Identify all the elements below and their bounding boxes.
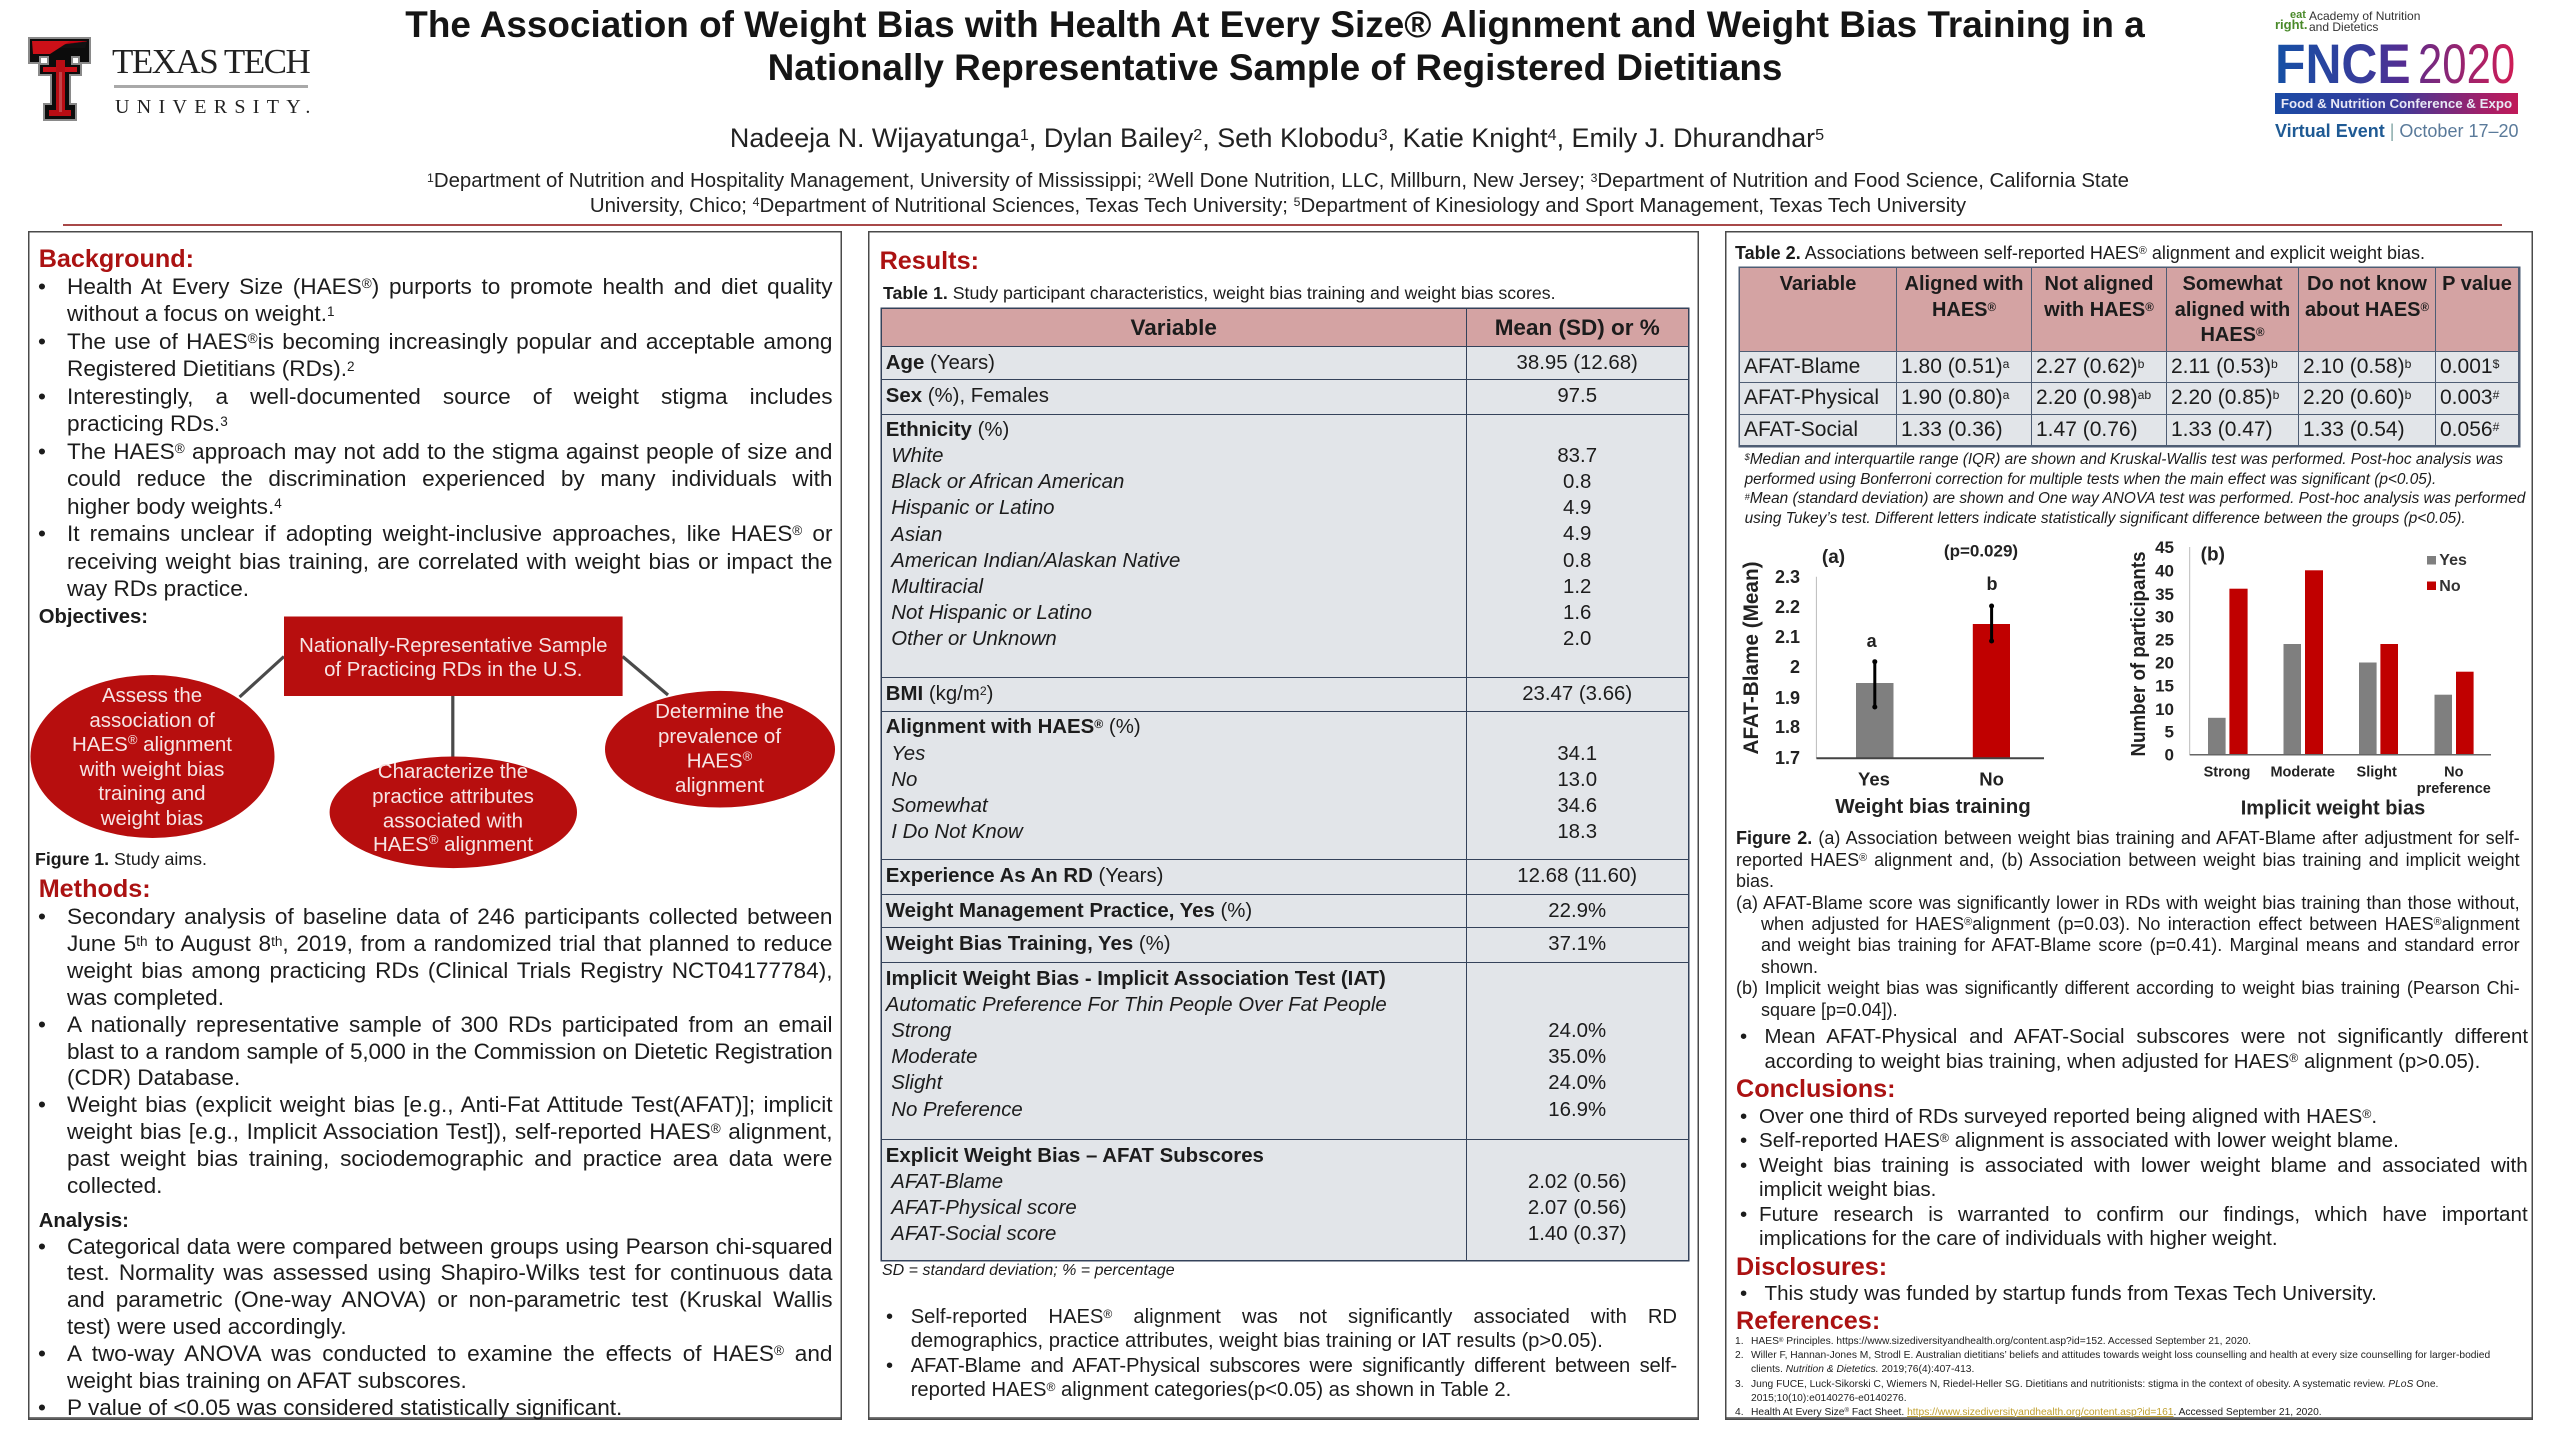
logo: FNCE 2020 [2275, 9, 2519, 141]
ellipse: characterize practice attributes: HAES [373, 833, 429, 856]
table 2: 2.20 (0.60)b [2303, 386, 2411, 409]
references list: 4. [1735, 1407, 1744, 1418]
row: ethnicity: 4.9 [1563, 523, 1591, 545]
ellipse: determine prevalence: prevalence of [658, 725, 781, 748]
ellipse: determine prevalence [605, 691, 835, 808]
heading: Background: Background: [39, 245, 194, 273]
ellipse: characterize practice attributes: associated with [383, 810, 523, 833]
heading: Analysis: Analysis: [39, 1210, 129, 1232]
chart a: AFAT-Blame by weight bias training: (p=0.029) [1944, 542, 2018, 560]
ellipse: assess association: ® [128, 732, 138, 747]
row: explicit weight bias: 2.07 (0.56) [1528, 1197, 1626, 1219]
row: ethnicity: Ethnicity (%) [886, 419, 1009, 441]
ellipse: assess association: weight bias [100, 807, 203, 830]
ellipse: assess association: Assess the [102, 684, 202, 707]
chart b: implicit weight bias by training: 25 [2155, 630, 2174, 650]
figure 2 caption: (a) AFAT-Blame score was significantly lower in RDs with weight bias training than those without, [1736, 893, 2520, 913]
row: weight bias training: 37.1% [1548, 933, 1606, 955]
analysis bullet list: Categorical data were compared between groups using Pearson chi-squared [67, 1234, 832, 1258]
figure 2 bullet [1740, 1025, 2528, 1074]
chart b: implicit weight bias by training: Number of participants [2128, 552, 2150, 756]
logo text: 2020: 2020 [2418, 32, 2515, 95]
title [405, 4, 2145, 88]
row: ethnicity: 0.8 [1563, 471, 1591, 493]
table 2: 1.33 (0.36) [1901, 418, 2003, 441]
background bullet list: The HAES® approach may not add to the stigma against people of size and [67, 439, 832, 464]
references list: clients. Nutrition & Dietetics. 2019;76(4):407-413. [1751, 1364, 1974, 1375]
row: age [882, 346, 1688, 379]
chart a: AFAT-Blame by weight bias training: a [1867, 631, 1878, 651]
row: age: 38.95 (12.68) [1517, 352, 1638, 374]
table 2: 2.27 (0.62)b [2036, 355, 2144, 378]
chart b: implicit weight bias by training: 45 [2155, 538, 2174, 557]
row: ethnicity: Asian [891, 524, 942, 546]
chart b: implicit weight bias by training [2128, 538, 2491, 820]
conclusions bullet list: Over one third of RDs surveyed reported being aligned with HAES®. [1759, 1105, 2377, 1128]
row: explicit weight bias: 2.02 (0.56) [1528, 1171, 1626, 1193]
heading: Results: Results: [880, 247, 979, 275]
references list: 3. [1735, 1379, 1744, 1390]
figure 2 caption: shown. [1761, 957, 1818, 977]
heading: Objectives: Objectives: [39, 606, 148, 628]
row: implicit weight bias: Slight [891, 1072, 942, 1094]
background bullet list: Registered Dietitians (RDs).2 [67, 356, 355, 381]
row: BMI [882, 677, 1688, 711]
row: implicit weight bias: Moderate [891, 1046, 977, 1068]
background bullet list: It remains unclear if adopting weight-inclusive approaches, like HAES® or [67, 521, 832, 546]
table 2 footnotes: #Mean (standard deviation) are shown and One way ANOVA test was performed. Post-hoc analysis was performed [1745, 490, 2525, 507]
logo text: Virtual Event: Virtual Event | October 17–20 [2275, 121, 2519, 141]
panel: background and methods [28, 231, 842, 1420]
logo: eat right Academy of Nutrition and Dietetics: right. [2275, 17, 2308, 32]
header [28, 4, 2519, 226]
row: ethnicity: Not Hispanic or Latino [891, 602, 1092, 624]
panel: table 2, figure 2, conclusions [1725, 231, 2533, 1420]
table 2: 1.33 (0.47) [2171, 418, 2273, 441]
row: weight management practice [882, 894, 1688, 927]
table 2: 2.11 (0.53)b [2171, 355, 2278, 378]
chart b: implicit weight bias by training: 30 [2155, 608, 2174, 626]
conclusions bullet list: implicit weight bias. [1759, 1178, 1936, 1201]
row: alignment with HAES: 34.6 [1557, 795, 1597, 817]
chart b: implicit weight bias by training: 5 [2165, 722, 2174, 742]
table 2: AFAT-Blame [1744, 355, 1860, 378]
row: implicit weight bias: Implicit Weight Bias - Implicit Association Test (IAT) [886, 968, 1386, 990]
background bullet list [38, 274, 832, 601]
ellipse: characterize practice attributes: Characterize the [378, 760, 528, 783]
box: sample: Nationally-Representative Sample [299, 635, 607, 657]
logo: eat right Academy of Nutrition and Dietetics: and Dietetics [2309, 20, 2378, 34]
references list: 1. [1735, 1336, 1744, 1347]
logo wordmark: UNIVERSITY: UNIVERSITY. [115, 96, 318, 118]
chart a: AFAT-Blame by weight bias training: b [1986, 574, 1998, 594]
conclusions bullet list [1740, 1105, 2528, 1250]
ellipse: determine prevalence: ® [743, 749, 753, 764]
ellipse: determine prevalence: Determine the [655, 700, 784, 723]
chart b: implicit weight bias by training: 10 [2155, 700, 2174, 719]
affiliations: 1Department of Nutrition and Hospitality Management, University of Mississippi; 2Well Done Nutrition, LLC, Millburn, New Jersey; 3Department of Nutrition and Food Science, California State [427, 170, 2129, 192]
affiliations: University, Chico; 4Department of Nutritional Sciences, Texas Tech University; 5Department of Kinesiology and Sport Management, Texas Tech University [590, 194, 1966, 216]
row: explicit weight bias: AFAT-Physical score [891, 1197, 1077, 1219]
analysis bullet list [38, 1234, 832, 1420]
heading: Disclosures: Disclosures: [1736, 1253, 1887, 1281]
header divider [63, 224, 2502, 226]
row: experience [882, 859, 1688, 894]
row: sex: 97.5 [1557, 385, 1597, 407]
row: alignment with HAES: 13.0 [1557, 769, 1597, 791]
table 1 header [882, 308, 1688, 346]
row: ethnicity: Black or African American [891, 471, 1124, 493]
logo: eat right Academy of Nutrition and Dietetics: eat [2290, 9, 2306, 21]
chart a: AFAT-Blame by weight bias training: 2 [1790, 657, 1800, 677]
table 2: 0.001$ [2440, 355, 2499, 378]
chart a: AFAT-Blame by weight bias training: 2.3 [1775, 567, 1800, 587]
table 2 footnotes: using Tukey’s test. Different letters indicate statistically significant difference between the groups (p<0.05). [1745, 510, 2466, 527]
chart a: AFAT-Blame by weight bias training: 1.7 [1775, 748, 1800, 768]
chart a: AFAT-Blame by weight bias training: 1.9 [1775, 688, 1800, 708]
row: alignment with HAES: Alignment with HAES® (%) [886, 716, 1141, 738]
conclusions bullet list: implications for the care of individuals with higher weight. [1759, 1227, 2278, 1250]
row: alignment with HAES: Yes [891, 743, 925, 765]
chart a: AFAT-Blame by weight bias training: Weight bias training [1835, 795, 2031, 818]
methods bullet list: blast to a random sample of 5,000 in the Commission on Dietetic Registration [67, 1039, 832, 1064]
row: ethnicity: American Indian/Alaskan Native [891, 550, 1180, 572]
row: explicit weight bias: AFAT-Social score [891, 1223, 1056, 1245]
box: sample [284, 616, 623, 696]
chart b: implicit weight bias by training: 0 [2165, 746, 2174, 764]
authors: Nadeeja N. Wijayatunga1, Dylan Bailey2, Seth Klobodu3, Katie Knight4, Emily J. Dhurandhar5 [730, 123, 1824, 153]
chart a: AFAT-Blame by weight bias training: AFAT-Blame (Mean) [1740, 562, 1763, 754]
chart b: implicit weight bias by training: Moderate [2270, 764, 2335, 780]
row: implicit weight bias [882, 962, 1688, 1139]
table 1 header: Mean (SD) or % [1495, 314, 1660, 340]
conclusions bullet list: Future research is warranted to confirm our findings, which have important [1759, 1203, 2528, 1226]
row: alignment with HAES: 34.1 [1557, 743, 1597, 765]
chart b: implicit weight bias by training: No [2444, 764, 2464, 780]
logo rule [114, 85, 308, 88]
figure 2 caption: square [p=0.04]). [1761, 1000, 1898, 1020]
background bullet list: Interestingly, a well-documented source of weight stigma includes [67, 384, 832, 409]
row: weight management practice: 22.9% [1548, 900, 1606, 922]
ellipse: characterize practice attributes: practice attributes [372, 785, 534, 808]
logo: Texas Tech University [28, 37, 318, 121]
chart b: implicit weight bias by training: 15 [2155, 676, 2174, 696]
methods bullet list: was completed. [67, 985, 224, 1010]
chart b: implicit weight bias by training: (b) [2201, 544, 2225, 566]
row: ethnicity: Other or Unknown [891, 628, 1057, 650]
table 2: with HAES® [2044, 299, 2154, 321]
analysis bullet list: A two-way ANOVA was conducted to examine the effects of HAES® and [67, 1341, 832, 1366]
analysis bullet list: and parametric (One-way ANOVA) or non-parametric test (Kruskal Wallis [67, 1287, 832, 1312]
ellipse: assess association: with weight bias [79, 758, 224, 781]
chart a: AFAT-Blame by weight bias training: (a) [1822, 547, 1845, 568]
chart b: implicit weight bias by training: preference [2417, 781, 2491, 797]
methods bullet list [38, 904, 832, 1198]
row: alignment with HAES: Somewhat [891, 795, 988, 817]
references list: Jung FUCE, Luck-Sikorski C, Wiemers N, Riedel-Heller SG. Dietitians and nutritionists: stigma in the context of obesity. A systematic review. PLoS One. [1751, 1379, 2438, 1390]
row: ethnicity: 4.9 [1563, 497, 1591, 519]
table 2: 1.47 (0.76) [2036, 418, 2138, 441]
row: experience: Experience As An RD (Years) [886, 865, 1163, 887]
chart a: AFAT-Blame by weight bias training: No [1979, 768, 2004, 790]
table 2: 1.80 (0.51)a [1901, 355, 2009, 378]
row: experience: 12.68 (11.60) [1517, 865, 1637, 887]
row: BMI: 23.47 (3.66) [1522, 683, 1632, 705]
table 2: 1.33 (0.54) [2303, 418, 2405, 441]
row: alignment with HAES: I Do Not Know [891, 821, 1023, 843]
ellipse: assess association: association of [89, 709, 215, 732]
heading: References: References: [1736, 1307, 1880, 1335]
row: ethnicity: White [891, 445, 943, 467]
chart b: implicit weight bias by training: 20 [2155, 654, 2174, 672]
table 2: HAES® [2200, 324, 2265, 346]
row: implicit weight bias: Strong [891, 1020, 951, 1042]
table 2: 0.056# [2440, 418, 2499, 441]
background bullet list: higher body weights.4 [67, 494, 282, 519]
row: alignment with HAES: 18.3 [1557, 821, 1597, 843]
chart a: AFAT-Blame by weight bias training: 2.1 [1775, 627, 1800, 647]
chart b: implicit weight bias by training: No [2439, 578, 2461, 595]
analysis bullet list: test. Normality was assessed using Shapiro-Wilks test for continuous data [67, 1260, 832, 1285]
diagram: study aims [30, 616, 835, 868]
methods bullet list: weight bias among practicing RDs (Clinical Trials Registry NCT04177784), [67, 958, 832, 983]
logo banner: Food & Nutrition Conference & Expo: Food & Nutrition Conference & Expo [2281, 96, 2512, 111]
methods bullet list: Weight bias (explicit weight bias [e.g., Anti-Fat Attitude Test(AFAT)]; implicit [67, 1092, 832, 1117]
logo: eat right Academy of Nutrition and Dietetics [2275, 9, 2420, 34]
heading: Methods: Methods: [39, 875, 151, 903]
chart b: implicit weight bias by training: 40 [2155, 562, 2174, 580]
row: ethnicity: 2.0 [1563, 628, 1591, 650]
chart b: implicit weight bias by training: Yes [2439, 552, 2467, 569]
table 2: about HAES® [2305, 299, 2429, 321]
row: implicit weight bias: Automatic Preference For Thin People Over Fat People [886, 994, 1387, 1016]
table 2 footnotes [1744, 451, 2526, 527]
disclosures bullet: This study was funded by startup funds from Texas Tech University. [1764, 1282, 2377, 1305]
table 1 footnote: SD = standard deviation; % = percentage [882, 1262, 1175, 1279]
analysis bullet list: test) were used accordingly. [67, 1314, 347, 1339]
ellipse: assess association: alignment [137, 733, 232, 756]
row: BMI: BMI (kg/m2) [886, 683, 993, 705]
ellipse: characterize practice attributes [330, 756, 577, 868]
chart b: implicit weight bias by training: Implicit weight bias [2241, 798, 2425, 820]
title: Nationally Representative Sample of Registered Dietitians [768, 47, 1782, 88]
icon: double T emblem [28, 37, 91, 121]
results bullet list: demographics, practice attributes, weight bias training or IAT results (p>0.05). [911, 1330, 1603, 1352]
results bullet list: Self-reported HAES® alignment was not significantly associated with RD [911, 1306, 1677, 1328]
background bullet list: practicing RDs.3 [67, 411, 228, 436]
analysis bullet list: weight bias training on AFAT subscores. [67, 1368, 467, 1393]
table 1 [882, 308, 1688, 1260]
panel: results [868, 231, 1699, 1420]
table 2: 2.20 (0.98)ab [2036, 386, 2151, 409]
figure 1 caption: Figure 1. Study aims. [35, 849, 207, 869]
chart a: AFAT-Blame by weight bias training: 2.2 [1775, 597, 1800, 617]
results bullet list [886, 1306, 1677, 1401]
figure 2 caption: when adjusted for HAES®alignment (p=0.03). No interaction effect between HAES®alignment [1761, 914, 2520, 934]
row: sex [882, 379, 1688, 414]
table 2: Not aligned [2045, 273, 2153, 295]
references list: HAES® Principles. https://www.sizediversityandhealth.org/content.asp?id=152. Accessed September 21, 2020. [1751, 1336, 2251, 1347]
logo banner: Food & Nutrition Conference & Expo [2275, 93, 2518, 114]
figure 2 caption: and weight bias training for AFAT-Blame score (p=0.41). Marginal means and standard error [1761, 935, 2520, 955]
chart a: AFAT-Blame by weight bias training [1740, 542, 2044, 818]
chart b: implicit weight bias by training: 35 [2155, 585, 2174, 604]
background bullet list: without a focus on weight.1 [67, 301, 335, 326]
ellipse: determine prevalence: HAES [687, 750, 743, 773]
row: ethnicity: 1.6 [1563, 602, 1591, 624]
chart a: AFAT-Blame by weight bias training: 1.8 [1775, 717, 1800, 737]
row: ethnicity: 1.2 [1563, 576, 1591, 598]
analysis bullet list: P value of <0.05 was considered statistically significant. [67, 1395, 622, 1420]
methods bullet list: weight bias [e.g., Implicit Association Test]), self-reported HAES® alignment, [67, 1119, 832, 1144]
background bullet list: Health At Every Size (HAES®) purports to promote health and diet quality [67, 274, 832, 299]
chart a: AFAT-Blame by weight bias training: Yes [1858, 768, 1890, 790]
ellipse: assess association: HAES [72, 733, 128, 756]
references list: 2. [1735, 1350, 1744, 1361]
background bullet list: receiving weight bias training, are correlated with weight bias or impact the [67, 549, 832, 574]
references list [1735, 1336, 2490, 1418]
row: ethnicity: Hispanic or Latino [891, 497, 1055, 519]
box: sample: of Practicing RDs in the U.S. [324, 659, 582, 681]
title: The Association of Weight Bias with Health At Every Size® Alignment and Weight Bias Training in a [405, 4, 2145, 45]
figure 2 charts [1740, 538, 2491, 820]
table 2: 0.003# [2440, 386, 2499, 409]
table 2: 2.20 (0.85)b [2171, 386, 2279, 409]
figure 2 caption [1736, 828, 2520, 1020]
row: alignment with HAES [882, 711, 1688, 859]
row: implicit weight bias: 16.9% [1548, 1099, 1606, 1121]
table 2: AFAT-Physical [1744, 386, 1879, 409]
row: ethnicity: 83.7 [1557, 445, 1597, 467]
methods bullet list: collected. [67, 1173, 162, 1198]
affiliations [427, 170, 2129, 216]
row: ethnicity: 0.8 [1563, 550, 1591, 572]
table 2: 1.90 (0.80)a [1901, 386, 2009, 409]
table 2: HAES® [1932, 299, 1996, 321]
row: ethnicity [882, 414, 1688, 677]
row: explicit weight bias: Explicit Weight Bias – AFAT Subscores [886, 1145, 1264, 1167]
table 2: AFAT-Social [1744, 418, 1858, 441]
row: weight management practice: Weight Management Practice, Yes (%) [886, 900, 1252, 922]
methods bullet list: Secondary analysis of baseline data of 246 participants collected between [67, 904, 832, 929]
references list: Health At Every Size® Fact Sheet. https://www.sizediversityandhealth.org/content.asp?id=161. Accessed September 21, 2020. [1751, 1407, 2322, 1418]
table 2 caption: Table 2. Associations between self-reported HAES® alignment and explicit weight bias. [1735, 243, 2425, 263]
chart b: implicit weight bias by training: Strong [2204, 764, 2250, 780]
methods bullet list: (CDR) Database. [67, 1065, 240, 1090]
table 2 footnotes: performed using Bonferroni correction for multiple tests when the main effect was significant (p<0.05). [1745, 471, 2436, 488]
ellipse: determine prevalence: alignment [675, 774, 764, 797]
table 2 [1740, 268, 2519, 446]
figure 2 caption: reported HAES® alignment and, (b) Association between weight bias training and implicit weight [1736, 850, 2520, 870]
table 2: 2.10 (0.58)b [2303, 355, 2411, 378]
figure 2 caption: Figure 2. (a) Association between weight bias training and AFAT-Blame after adjustment for self- [1736, 828, 2520, 848]
row: weight bias training [882, 927, 1688, 962]
row: implicit weight bias: No Preference [891, 1099, 1023, 1121]
row: implicit weight bias: 35.0% [1548, 1046, 1606, 1068]
background bullet list: way RDs practice. [67, 576, 249, 601]
row: explicit weight bias: 1.40 (0.37) [1528, 1223, 1626, 1245]
row: implicit weight bias: 24.0% [1548, 1020, 1606, 1042]
conclusions bullet list: Weight bias training is associated with lower weight blame and associated with [1759, 1154, 2528, 1177]
ellipse: characterize practice attributes: alignment [438, 833, 533, 856]
logo: eat right Academy of Nutrition and Dietetics: Academy of Nutrition [2309, 9, 2420, 23]
row: explicit weight bias: AFAT-Blame [891, 1171, 1003, 1193]
heading: Conclusions: Conclusions: [1736, 1075, 1896, 1103]
references list: 2015;10(10):e0140276-e0140276. [1751, 1393, 1907, 1404]
conclusions bullet list: Self-reported HAES® alignment is associated with lower weight blame. [1759, 1129, 2399, 1152]
figure 2 bullet: Mean AFAT-Physical and AFAT-Social subscores were not significantly different [1764, 1026, 2528, 1048]
results bullet list: AFAT-Blame and AFAT-Physical subscores were significantly different between self- [911, 1355, 1677, 1377]
chart b: implicit weight bias by training: Slight [2357, 764, 2397, 780]
background bullet list: The use of HAES®is becoming increasingly popular and acceptable among [67, 329, 832, 354]
table 2: Somewhat [2182, 273, 2283, 295]
logo text: FNCE: FNCE [2275, 32, 2411, 95]
table 2 footnotes: $Median and interquartile range (IQR) are shown and Kruskal-Wallis test was performed. Post-hoc analysis was [1745, 451, 2503, 468]
logo wordmark: TEXAS TECH: TEXAS TECH [112, 42, 309, 81]
row: alignment with HAES: No [891, 769, 917, 791]
table 2: aligned with [2175, 299, 2290, 321]
figure 2 caption: (b) Implicit weight bias was significantly different according to weight bias training (Pearson Chi- [1736, 978, 2520, 998]
ellipse: assess association [30, 675, 274, 838]
row: implicit weight bias: 24.0% [1548, 1072, 1606, 1094]
references list: Willer F, Hannan-Jones M, Strodl E. Australian dietitians’ beliefs and attitudes towards weight loss counselling and health at every size counselling for larger-bodied [1751, 1350, 2490, 1361]
figure 2 bullet: according to weight bias training, when adjusted for HAES® alignment (p>0.05). [1764, 1050, 2480, 1072]
results bullet list: reported HAES® alignment categories(p<0.05) as shown in Table 2. [911, 1379, 1511, 1401]
table 2: Variable [1780, 273, 1856, 295]
table 2: P value [2442, 273, 2512, 295]
ellipse: assess association: training and [98, 782, 206, 805]
methods bullet list: A nationally representative sample of 300 RDs participated from an email [67, 1012, 832, 1037]
table 2: Aligned with [1905, 273, 2023, 295]
methods bullet list: past weight bias training, sociodemographic and practice area data were [67, 1146, 832, 1171]
ellipse: characterize practice attributes: ® [429, 832, 439, 847]
figure 2 caption: bias. [1736, 871, 1774, 891]
methods bullet list: June 5th to August 8th, 2019, from a randomized trial that planned to reduce [67, 931, 832, 956]
row: sex: Sex (%), Females [886, 385, 1049, 407]
row: weight bias training: Weight Bias Training, Yes (%) [886, 933, 1171, 955]
row: ethnicity: Multiracial [891, 576, 983, 598]
background bullet list: could reduce the discrimination experienced by many individuals with [67, 466, 832, 491]
row: age: Age (Years) [886, 352, 995, 374]
table 2: Do not know [2307, 273, 2427, 295]
table 1 caption: Table 1. Study participant characteristics, weight bias training and weight bias scores. [883, 283, 1556, 303]
table 1 header: Variable [1131, 314, 1217, 340]
row: explicit weight bias [882, 1139, 1688, 1260]
